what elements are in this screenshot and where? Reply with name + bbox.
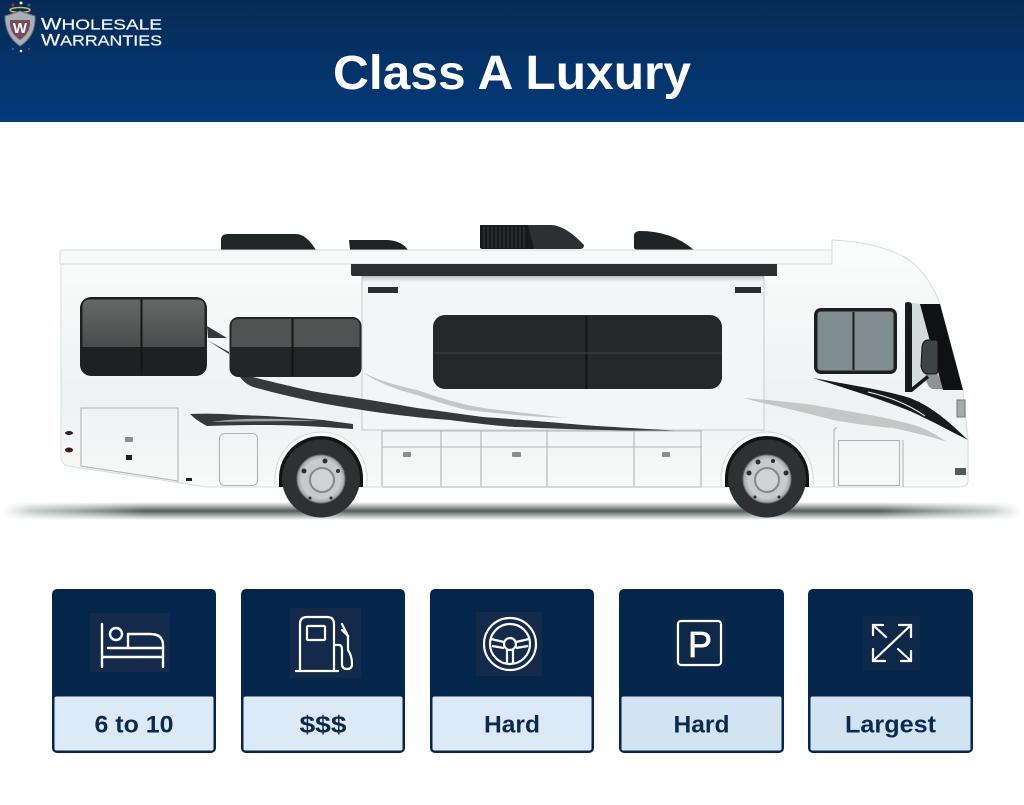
icon: bed [102,624,163,667]
logo: Wholesale Warranties [5,2,162,52]
label: Hard: Hard [484,712,540,738]
rear window [80,297,207,376]
title: Class A Luxury [333,47,691,100]
cab side window [814,308,897,374]
body compartments [81,408,903,487]
logo wordmark [41,16,162,50]
icon: parking sign [678,621,721,665]
header banner [0,0,1024,122]
rear tail lights [65,431,73,452]
roof equipment [221,225,694,250]
stat card: fuel cost [241,589,405,753]
icon: fuel pump [296,617,352,671]
icon: logo shield: W [13,20,28,37]
RV body shell [61,240,968,487]
label: Hard: Hard [674,712,730,738]
slide-out panel [362,276,764,430]
logo wordmark: WARRANTIES [41,32,162,50]
awning shadow [362,276,764,282]
icon: steering wheel [484,618,536,670]
stat card: size [808,589,973,753]
illustration: Class A motorhome [60,225,968,518]
icon: side mirror [921,340,938,374]
stat card: parking difficulty [619,589,784,753]
grey sliver in lower stripe [212,419,320,422]
label: $$$: $$$ [300,712,347,738]
stat card: driving difficulty [430,589,594,753]
front wheel [721,432,813,518]
icon: expand arrows [873,625,911,661]
icon: logo shield [5,2,35,52]
black front swoosh [813,378,968,440]
icon: parking sign: P [688,624,712,665]
logo wordmark: W HOLESALE [41,16,162,34]
slide-out vents [368,287,761,293]
rear wheel [275,432,367,518]
label: 6 to 10: 6 to 10 [94,712,174,738]
windshield [905,302,963,392]
roof rail [60,250,832,264]
ground shadow [0,502,1024,520]
slide-out window [433,315,722,389]
label: Largest: Largest [845,712,936,738]
compartment latches [125,437,670,481]
grey body stripes [362,372,947,442]
front lights [955,400,966,475]
awning [351,264,777,276]
stat card: sleeps [52,589,216,753]
dark body stripes [190,326,684,431]
middle window [230,317,362,377]
